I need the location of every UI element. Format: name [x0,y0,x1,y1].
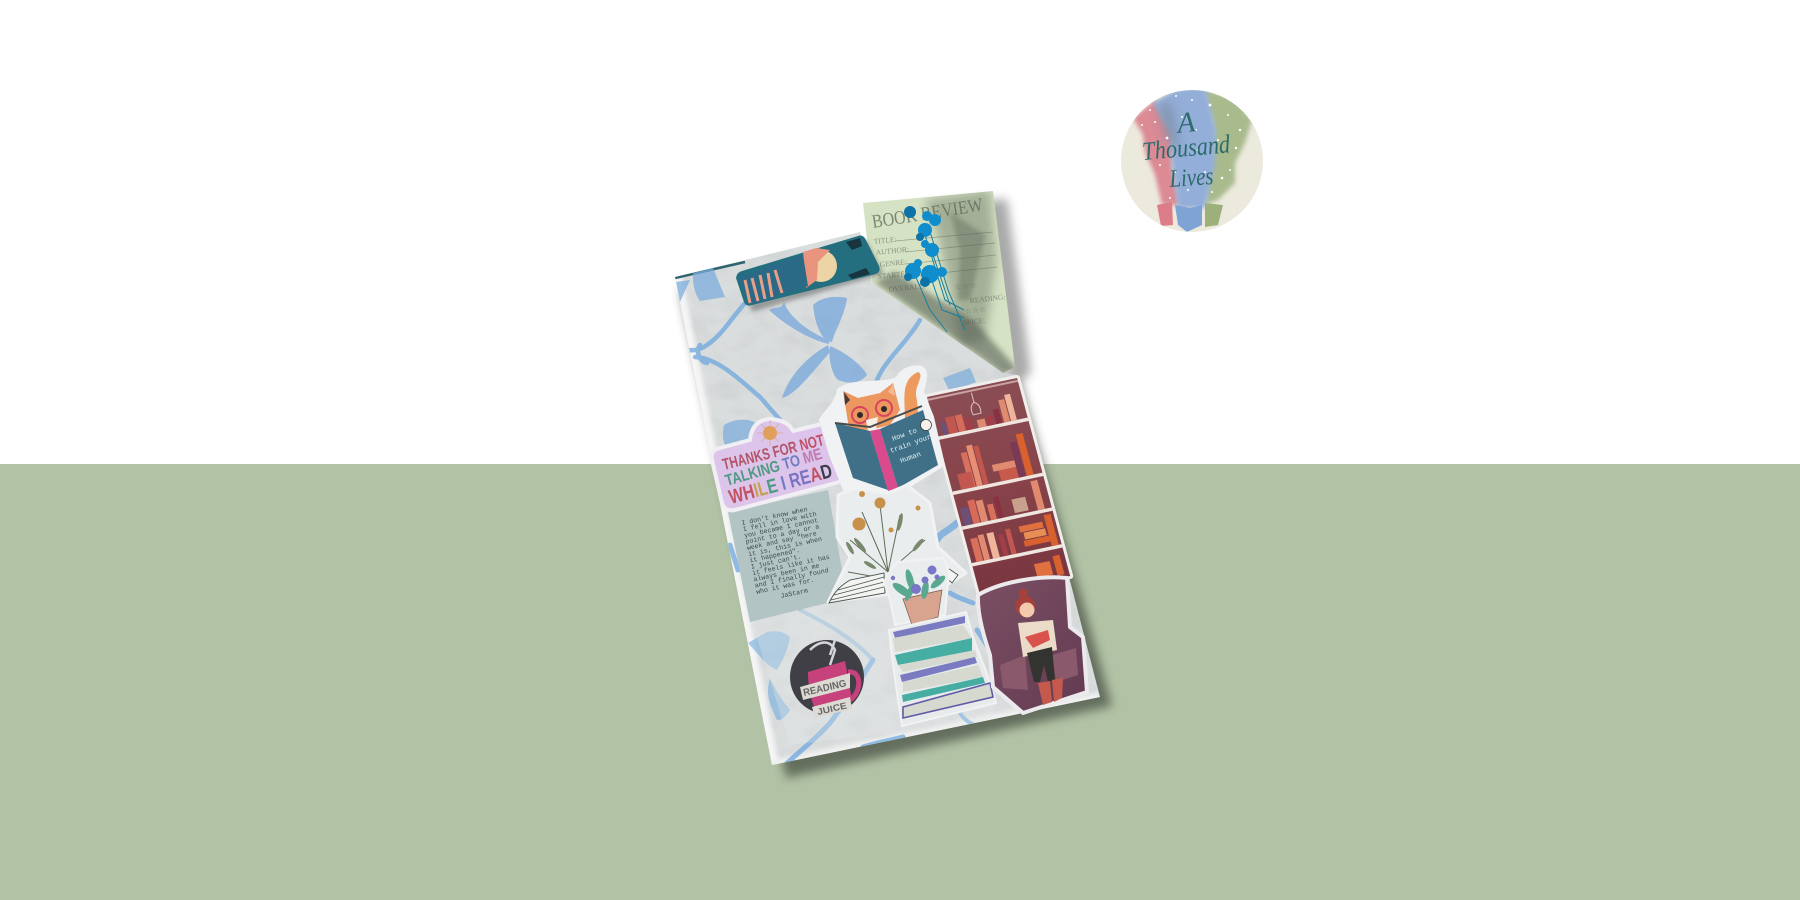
cat tail [904,372,921,420]
keychain: reading juice mug: JUICE [816,700,848,717]
open book pages [829,564,958,603]
card fields: GENRE: [879,257,907,269]
card fields: STARTED: [877,268,913,281]
stack: purple book [893,616,965,638]
sticker: thanks for not talking to me: TALKING TO ME [723,446,824,490]
poem text: it feels like it has [752,554,831,577]
logo wordmark: Thousand [1141,129,1232,166]
cat paw [920,420,932,430]
small bow behind shelf [943,368,976,390]
poem text: JaStarm [780,587,809,600]
large centre bow [769,297,867,398]
logo books [1157,202,1223,232]
books on shelves [934,392,1066,592]
sticker: thanks for not talking to me: THANKS FOR NOT [721,432,826,474]
poem text: and I finally found [754,567,829,590]
tissue paper package [670,230,1112,778]
card shadows cast by stems and flap [925,190,996,345]
poem text: it happened". [749,547,801,565]
logo: A Thousand Lives [1121,86,1263,232]
left bow behind sticker [722,420,755,445]
poem text: week and say "here [746,530,817,552]
sticker: flowers growing from open book [828,485,966,603]
top left bow [676,268,725,302]
shelf boards [938,418,1063,567]
poem text: it is, this is when [748,536,823,558]
dark edge along the top fold [675,262,745,278]
card fields: TITLE: [873,235,897,246]
poem text: point to a day or a [745,523,820,546]
sticker: stack of books [889,612,996,726]
sun icon [757,420,783,446]
poem text: I fell in love with [742,511,817,533]
poem text [741,503,838,600]
card shadow [882,199,1031,383]
card heading: BOOK REVIEW [870,195,984,233]
hanging lamp [967,392,981,415]
open blue book [835,423,888,490]
lower left bow through plastic [748,631,790,720]
poem text: who it was for. [756,577,815,596]
book cover title: Human [899,451,922,466]
card fields: READING: [969,292,1006,305]
poem text: I just can't. [750,553,802,571]
logo stars [1141,95,1241,199]
card fields: AUTHOR: [875,245,909,257]
stack: teal book 2 [902,677,985,702]
card fields: ☆☆☆ [964,305,987,316]
sticker: thanks for not talking to me: WHILE I READ [727,460,835,509]
poem text: you became I cannot [744,517,819,539]
reading girl [1015,588,1063,705]
card fields: OVERALL: [888,281,926,294]
clear plastic pouch [757,610,975,743]
stack: teal book [895,638,972,665]
card fields: ☆☆☆ [954,281,977,292]
poem text: always been in me [753,562,820,583]
book cover title: train your [889,434,933,456]
logo wordmark [1141,106,1232,193]
golden blossoms [852,491,920,532]
book cover title [889,427,933,466]
card fields: SPICE: [962,316,986,327]
keychain lettering: READING [802,678,848,699]
patterned bookmark [736,236,884,312]
cat glasses [852,400,892,423]
package shadow [680,290,1112,778]
logo wordmark: Lives [1168,163,1214,193]
book cover title: How to [891,427,918,444]
dried blue flowers [904,206,965,332]
sticker: orange cat reading book [820,367,944,505]
lighter wrapped edge [675,277,772,765]
sticker: red bookshelf [923,374,1074,599]
blue ribbon lattice [689,301,986,762]
logo wordmark: A [1174,106,1197,140]
keychain: reading juice mug [790,640,864,718]
stack: large bottom book [903,683,993,718]
paper wrinkles [695,256,1008,396]
flower stems [848,505,925,578]
book review card [863,190,1031,383]
sticker: girl reading in armchair [978,577,1087,713]
background: sage green lower band [0,464,1800,900]
sticker: thanks for not talking to me [712,419,850,510]
poem text: I don't know when [741,506,808,527]
note card with poem [728,490,847,622]
card fields [873,235,1006,327]
stack: purple book 2 [900,657,977,682]
sticker: potted plant [884,558,949,625]
cat head and ears [843,383,900,435]
